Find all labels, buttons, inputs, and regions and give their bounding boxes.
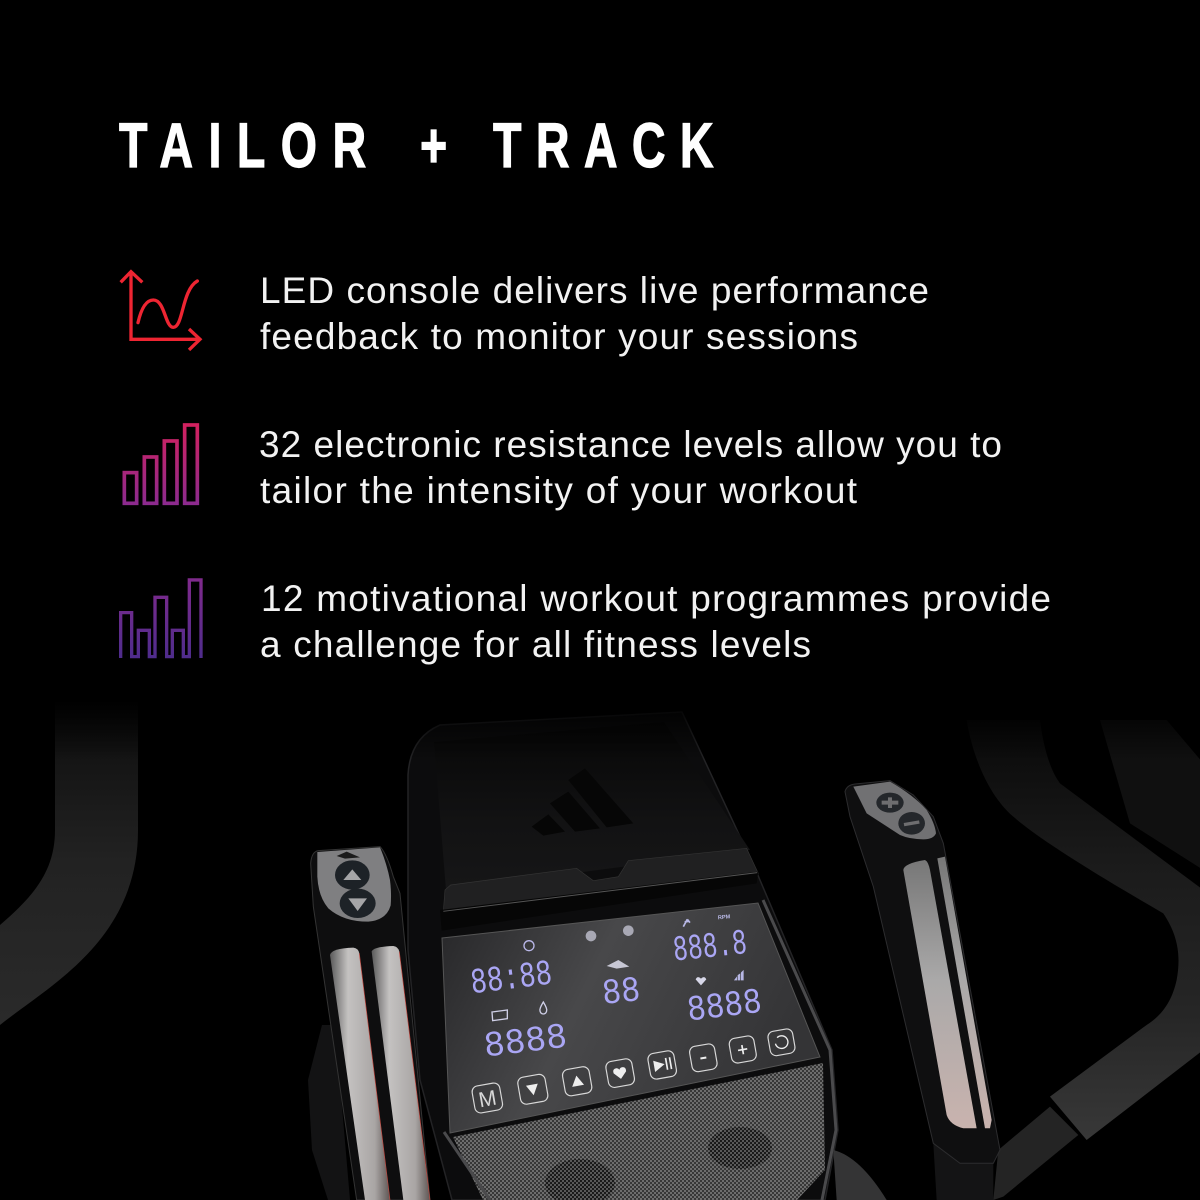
rear frame pieces behind left handle xyxy=(308,1025,350,1200)
LED display and touch buttons xyxy=(468,914,796,1114)
pulse sensor strips xyxy=(330,948,390,1200)
LED readouts: 88:88 xyxy=(468,954,554,1004)
brand three-bar mark xyxy=(532,768,633,836)
text: LED console feature: LED console delivers live performance xyxy=(260,270,929,311)
button: down xyxy=(517,1073,549,1105)
text: programmes feature: a challenge for all fitness levels xyxy=(260,624,811,665)
grip control pad xyxy=(317,847,391,922)
button: M: M xyxy=(477,1086,498,1112)
icon: performance line chart xyxy=(121,272,200,350)
console housing xyxy=(408,712,838,1200)
title: TAILOR xyxy=(119,110,366,181)
left handlebar tube xyxy=(0,700,138,1025)
console metal rim xyxy=(444,900,836,1200)
button: play pause xyxy=(647,1050,677,1080)
button: reset xyxy=(767,1028,796,1057)
LED readouts: 8888 xyxy=(685,982,764,1032)
title: TRACK xyxy=(493,110,714,181)
title xyxy=(119,110,714,181)
button: minus xyxy=(689,1043,718,1073)
right hand grip xyxy=(833,781,1000,1200)
upper console panel xyxy=(434,722,750,890)
text: resistance feature: 32 electronic resistance levels allow you to xyxy=(259,424,1002,465)
button: up xyxy=(562,1066,593,1097)
pulse sensor strips xyxy=(903,860,977,1128)
LED readouts: 8888 xyxy=(482,1017,569,1068)
text: programmes feature xyxy=(260,578,1051,665)
tablet shelf xyxy=(440,848,758,931)
console face xyxy=(442,903,820,1133)
text: resistance feature xyxy=(259,424,1002,511)
product: cross trainer console xyxy=(0,700,1200,1200)
LED readouts: 88 xyxy=(600,970,642,1015)
icon: programme profile bars xyxy=(121,580,201,658)
left hand grip xyxy=(311,847,430,1200)
text: resistance feature: tailor the intensity of your workout xyxy=(260,470,858,511)
text: programmes feature: 12 motivational workout programmes provide xyxy=(261,578,1051,619)
feature: LED console xyxy=(121,270,929,357)
LED readouts xyxy=(468,923,764,1068)
top fade over product xyxy=(0,700,1200,760)
button: plus xyxy=(728,1035,757,1064)
feature: workout programmes xyxy=(121,578,1051,665)
grip control pad xyxy=(853,782,936,839)
LED readouts: 888.8 xyxy=(671,923,749,972)
speaker grille xyxy=(453,1063,825,1200)
text: LED console feature xyxy=(260,270,929,357)
display icons: RPM xyxy=(718,914,731,921)
text: LED console feature: feedback to monitor your sessions xyxy=(260,316,858,357)
display icons xyxy=(492,914,743,1021)
title: + xyxy=(420,110,447,181)
button: heart xyxy=(605,1058,635,1088)
feature: resistance levels xyxy=(124,424,1002,511)
button: M xyxy=(471,1082,503,1114)
icon: resistance bars xyxy=(124,425,197,503)
right handlebar arm xyxy=(967,720,1200,1200)
